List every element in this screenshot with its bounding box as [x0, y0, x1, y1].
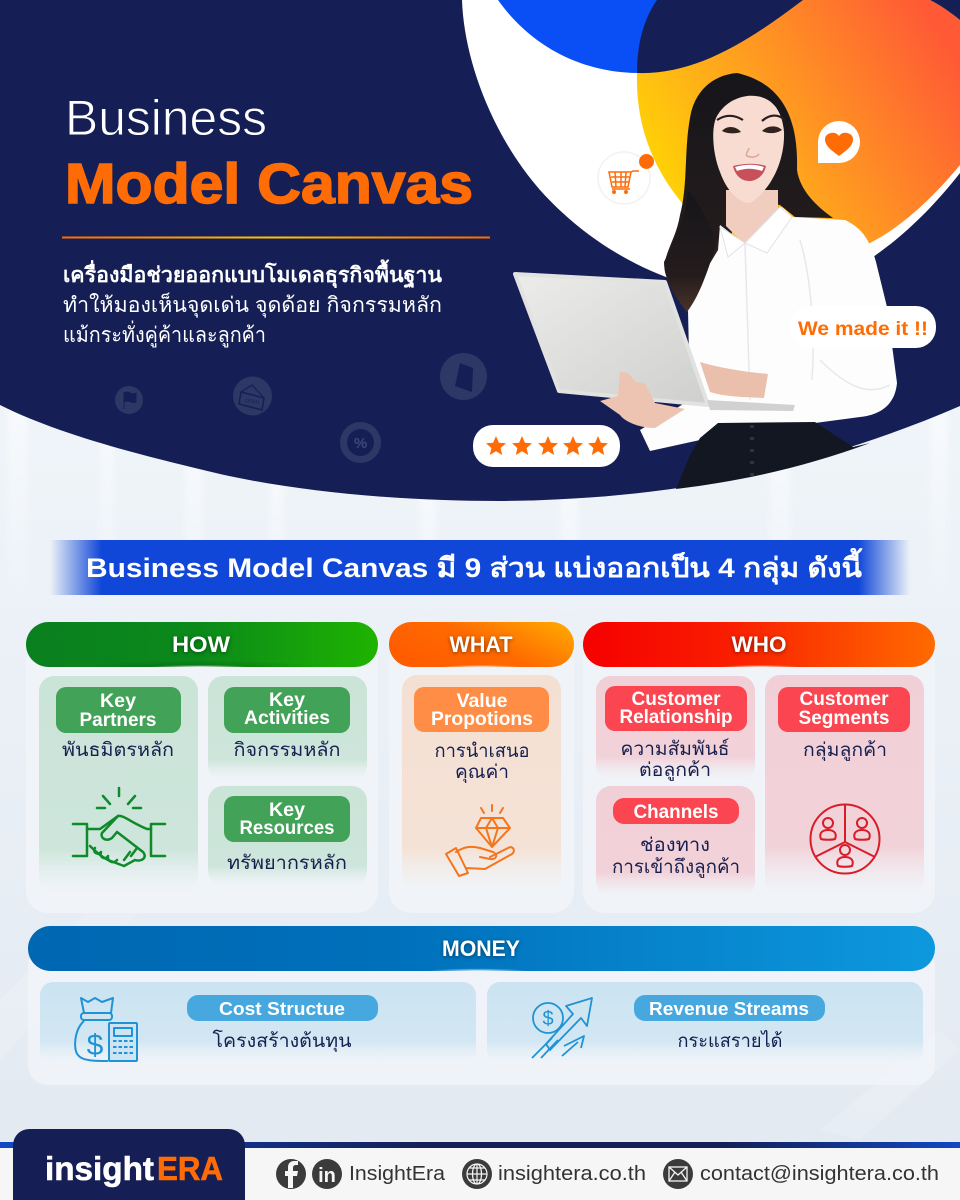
jeans buttons	[750, 425, 754, 478]
card: key resources: Resources	[240, 818, 334, 839]
icon: mail	[663, 1159, 693, 1189]
icon: heart bubble	[818, 121, 860, 163]
card: key activities: Activities	[244, 708, 330, 729]
smile	[733, 164, 766, 181]
card: channels: Channels	[634, 802, 718, 823]
title line 1: Business	[65, 90, 267, 146]
brows and eyes	[717, 116, 785, 157]
card: cost structure: โครงสร้างต้นทุน	[212, 1029, 352, 1053]
heading: what	[389, 622, 574, 667]
title	[65, 90, 473, 216]
card: value propositions: คุณค่า	[455, 762, 509, 784]
card: key resources: Key	[269, 800, 305, 821]
card: customer relationship: ความสัมพันธ์	[620, 738, 730, 760]
card: revenue streams	[487, 982, 923, 1064]
heading: money	[28, 926, 935, 971]
icon: linkedin	[312, 1159, 342, 1189]
intro text: ทำให้มองเห็นจุดเด่น จุดด้อย กิจกรรมหลัก	[63, 291, 442, 318]
neck	[726, 190, 778, 246]
jeans	[676, 422, 870, 489]
heading: what: WHAT	[450, 632, 513, 657]
icon: cart badge	[598, 152, 654, 204]
panel: what	[389, 622, 574, 913]
card: key partners: พันธมิตรหลัก	[62, 740, 174, 761]
shape: blue circle	[498, 0, 680, 73]
icon: facebook	[276, 1159, 306, 1189]
card: customer segments: Customer	[800, 689, 889, 710]
card: value propositions	[402, 675, 561, 892]
shape: orange blob	[637, 0, 960, 262]
heading: how: HOW	[172, 632, 230, 657]
card: value propositions: การนำเสนอ	[434, 741, 530, 762]
holding hand	[600, 372, 685, 428]
callout: we made it	[790, 306, 936, 348]
collar	[720, 207, 792, 257]
icon: money bag and calculator: $	[87, 1029, 104, 1062]
icon: globe	[462, 1159, 492, 1189]
email: contact@insightera.co.th	[700, 1163, 939, 1185]
card: customer segments	[765, 675, 924, 895]
logo: insight	[45, 1150, 154, 1187]
hair	[665, 73, 833, 312]
typing hand	[700, 362, 768, 398]
card: customer relationship	[596, 676, 755, 781]
card: value propositions: Propotions	[431, 709, 533, 730]
front hair lock	[664, 190, 716, 312]
card: key partners: Partners	[80, 710, 156, 731]
icon: rising money arrow	[532, 998, 592, 1058]
icon: customer pie	[810, 804, 880, 874]
footer	[0, 1129, 960, 1200]
icon: open sign	[233, 376, 272, 416]
laptop	[515, 274, 795, 411]
card: channels: ช่องทาง	[640, 835, 710, 856]
shape: navy blob	[637, 0, 803, 73]
icon: tag	[440, 353, 487, 400]
panel: money	[28, 926, 935, 1085]
shirt shading	[745, 240, 890, 400]
intro text	[63, 259, 443, 348]
card: customer segments: กลุ่มลูกค้า	[803, 740, 887, 762]
shirt	[640, 207, 897, 451]
person with laptop	[515, 73, 897, 489]
icon: money bag and calculator	[75, 998, 137, 1062]
card: customer relationship: Relationship	[620, 707, 732, 728]
shape: navy corner	[930, 0, 960, 20]
section banner: Business Model Canvas มี 9 ส่วน แบ่งออกเป็น 4 กลุ่ม ดังนี้	[86, 547, 863, 585]
card: key resources: ทรัพยากรหลัก	[227, 853, 347, 874]
heading: who	[583, 622, 935, 667]
logo: ERA	[157, 1150, 223, 1187]
card: cost structure	[40, 982, 476, 1064]
heading: who: WHO	[732, 632, 786, 657]
website: insightera.co.th	[498, 1163, 646, 1185]
section banner	[50, 540, 910, 595]
heading: money: MONEY	[442, 936, 520, 961]
panel: who	[583, 622, 935, 913]
card: channels	[596, 786, 755, 897]
card: cost structure: Cost Structue	[219, 998, 345, 1019]
hero banner	[0, 0, 960, 501]
intro text: เครื่องมือช่วยออกแบบโมเดลธุรกิจพื้นฐาน	[63, 259, 443, 289]
icon: linkedin: in	[318, 1165, 336, 1187]
icon: rising money arrow: $	[542, 1008, 554, 1030]
hero navy background	[0, 0, 960, 501]
icon: percent badge	[340, 422, 381, 463]
card: key activities	[208, 676, 367, 780]
card: customer relationship: ต่อลูกค้า	[639, 760, 711, 781]
card: key activities: Key	[269, 690, 305, 711]
card: customer relationship: Customer	[632, 689, 721, 710]
logo	[13, 1129, 245, 1200]
social name: InsightEra	[349, 1163, 446, 1185]
icon: percent badge: %	[354, 435, 367, 452]
shape: white circle	[462, 0, 960, 294]
face	[713, 96, 784, 203]
intro text: แม้กระทั่งคู่ค้าและลูกค้า	[63, 320, 266, 348]
icon: open sign: OPEN	[244, 398, 260, 406]
card: key activities: กิจกรรมหลัก	[234, 740, 340, 761]
card: channels: การเข้าถึงลูกค้า	[612, 857, 740, 878]
card: revenue streams: กระแสรายได้	[678, 1030, 782, 1052]
card: key resources	[208, 786, 367, 886]
card: value propositions: Value	[456, 691, 508, 712]
icon: diamond in hand	[446, 805, 514, 876]
callout: five stars	[473, 425, 620, 467]
card: revenue streams: Revenue Streams	[649, 998, 809, 1019]
heading: how	[26, 622, 378, 667]
card: key partners: Key	[100, 691, 136, 712]
title line 2: Model Canvas	[65, 152, 473, 216]
card: customer segments: Segments	[798, 708, 890, 729]
callout: we made it: We made it !!	[798, 319, 928, 340]
icon: handshake	[73, 788, 165, 866]
icon: flag	[115, 386, 143, 414]
panel: how	[26, 622, 378, 913]
card: key partners	[39, 676, 198, 892]
